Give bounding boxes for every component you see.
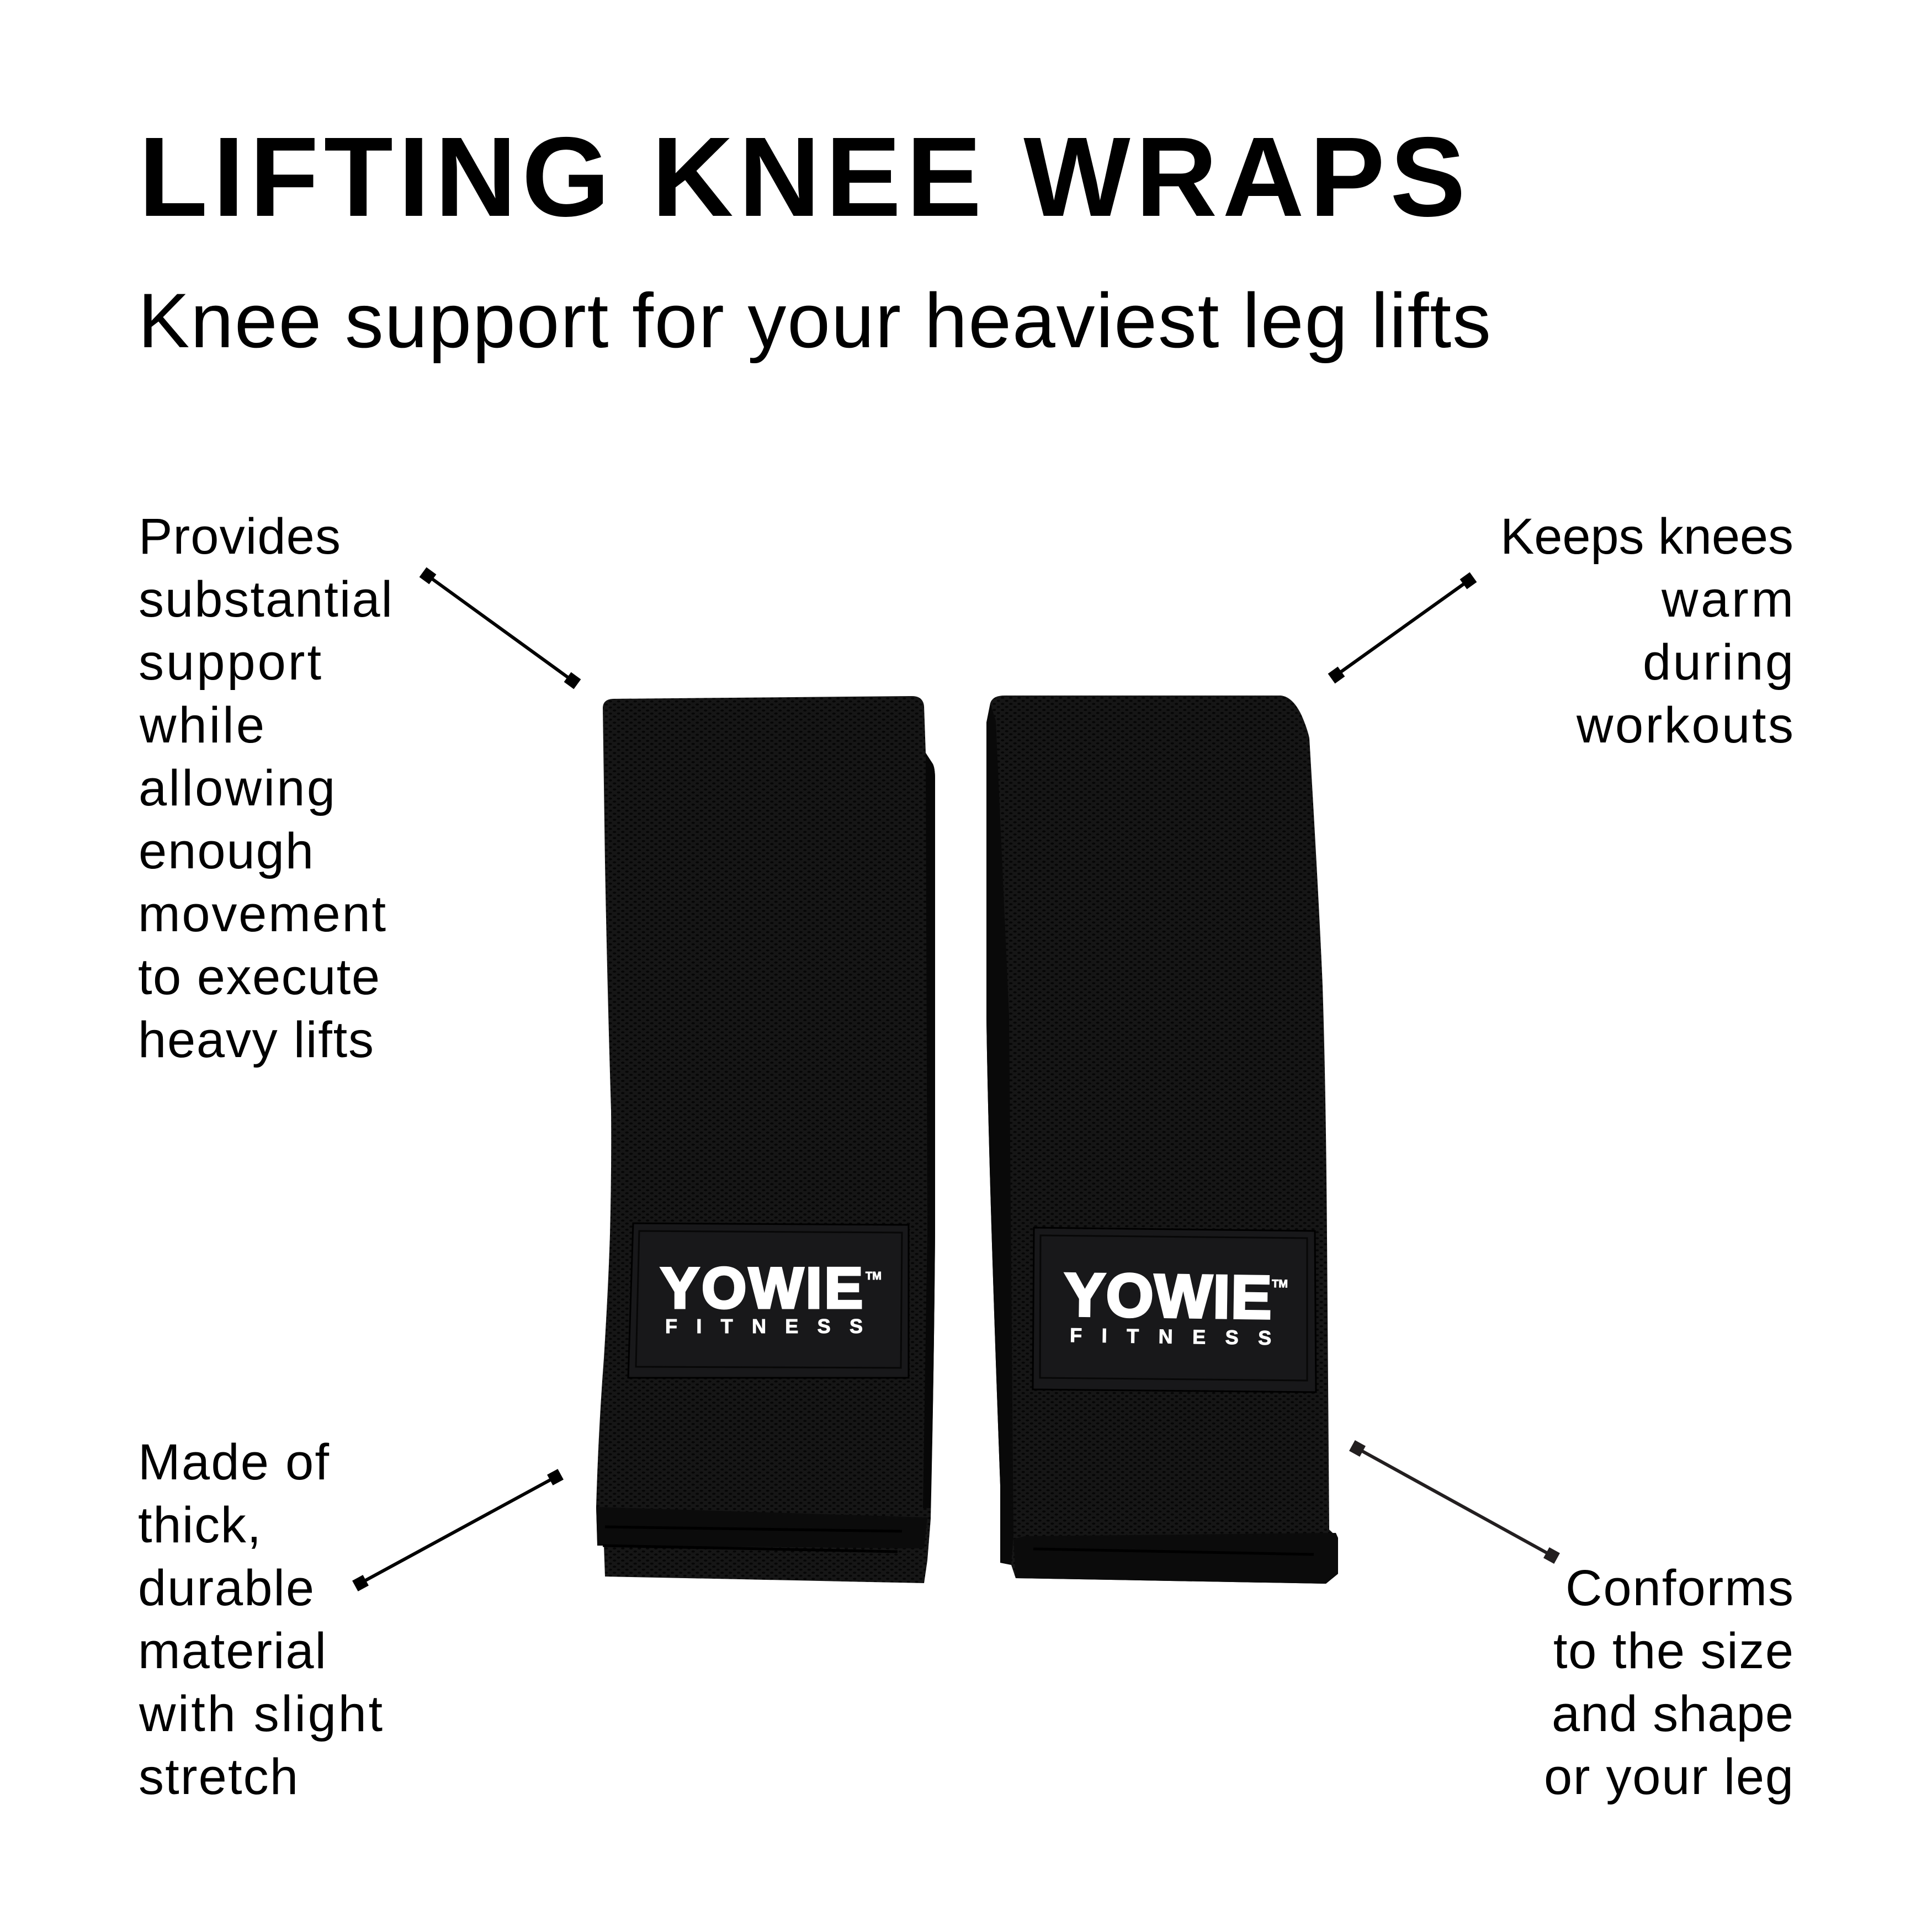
left wrap back layer [923, 753, 935, 1508]
text block: substantial support: movement [138, 886, 386, 942]
right knee wrap [986, 696, 1338, 1584]
text block: substantial support: allowing [139, 760, 335, 816]
connector: bottom left [352, 1469, 564, 1591]
text block: durable material [138, 1434, 383, 1805]
text block: conforms to leg [1544, 1560, 1793, 1805]
text block: durable material: thick, [138, 1497, 261, 1553]
left logo patch [628, 1223, 909, 1378]
text block: durable material: Made of [138, 1434, 329, 1490]
text block: substantial support [138, 508, 392, 1068]
text block: durable material: stretch [139, 1749, 298, 1805]
right logo patch [1033, 1228, 1316, 1392]
text block: substantial support: to execute [138, 949, 380, 1005]
connector: top right [1328, 572, 1477, 683]
text block: durable material: material [138, 1623, 326, 1679]
right wrap back layer [986, 703, 1013, 1565]
text block: conforms to leg: Conforms [1565, 1560, 1793, 1616]
right wrap body [986, 696, 1338, 1584]
right wrap folded end [1013, 1533, 1338, 1584]
text block: keeps knees warm: warm [1661, 571, 1793, 628]
text block: durable material: with slight [139, 1686, 383, 1742]
text block: substantial support: heavy lifts [138, 1012, 374, 1068]
right logo trademark: TM [1272, 1278, 1288, 1290]
connector: bottom right [1349, 1440, 1560, 1564]
text block: keeps knees warm: Keeps knees [1500, 508, 1793, 565]
text block: keeps knees warm: workouts [1576, 697, 1793, 753]
right logo subline: FITNESS [1070, 1324, 1271, 1349]
right logo wordmark: YOWIE [1064, 1261, 1272, 1331]
text block: keeps knees warm [1500, 508, 1793, 753]
left knee wrap [596, 696, 935, 1583]
connector: top left [420, 567, 581, 689]
left wrap folded end [596, 1507, 927, 1552]
text block: substantial support: while [139, 697, 264, 753]
text block: conforms to leg: to the size [1553, 1623, 1793, 1679]
text block: substantial support: Provides [139, 508, 341, 565]
text block: conforms to leg: or your leg [1544, 1749, 1793, 1805]
title: LIFTING KNEE WRAPS [139, 114, 1466, 240]
left logo trademark: TM [866, 1270, 882, 1282]
left logo wordmark: YOWIE [661, 1256, 863, 1320]
left wrap body [596, 696, 935, 1583]
text block: conforms to leg: and shape [1552, 1686, 1793, 1742]
left logo subline: FITNESS [665, 1315, 863, 1337]
text block: keeps knees warm: during [1643, 634, 1793, 691]
text block: durable material: durable [138, 1560, 314, 1616]
subtitle: Knee support for your heaviest leg lifts [138, 277, 1491, 364]
text block: substantial support: support [139, 634, 321, 691]
text block: substantial support: enough [139, 823, 314, 879]
text block: substantial support: substantial [139, 571, 392, 628]
